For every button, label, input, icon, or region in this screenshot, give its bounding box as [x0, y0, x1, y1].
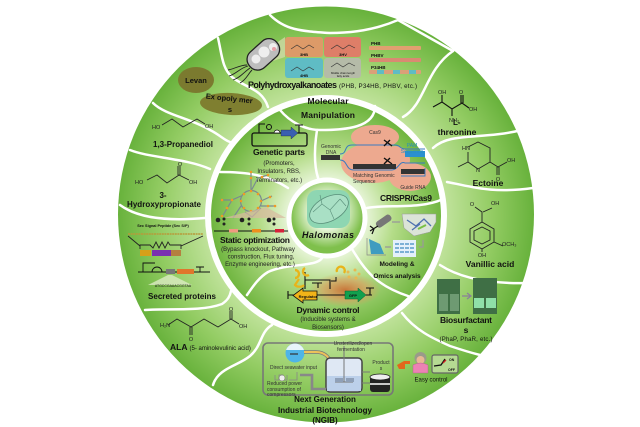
structure: HO [152, 125, 161, 131]
label: PHA examples: (PHB, P34HB, PHBV, etc.) [339, 83, 417, 90]
structure: OH [438, 90, 446, 96]
icon: on/off switch: ON [449, 358, 455, 362]
polymer bars: PHB, PHBV, P34HB [369, 41, 421, 74]
monomer: 3HV [324, 37, 361, 57]
panel: CRISPR/Cas9: Cas9 [369, 130, 381, 136]
icon: sensor molecules [295, 268, 309, 287]
sector: next generation industrial biotechnology: Unsterilized/open [334, 341, 373, 347]
panel: CRISPR/Cas9: Matching Genomic [353, 173, 395, 179]
sector: ALA [160, 307, 251, 352]
panel: dynamic control [288, 267, 381, 331]
panel: CRISPR/Cas9: Guide RNA [400, 185, 426, 191]
panel: static optimization: construction, Flux tuning, [228, 254, 295, 260]
sector: ALA: ALA (5- aminolevulinic acid) [170, 342, 251, 352]
sector: secreted proteins: Secreted proteins [148, 292, 217, 301]
monomer: 4HB: 4HB [300, 73, 308, 78]
signal peptide spring [128, 236, 203, 249]
icon: operator [413, 352, 428, 373]
structure [160, 307, 247, 343]
structure: OH [469, 107, 477, 113]
panel: dynamic control: Dynamic control [296, 305, 360, 315]
icon: sea and ship [286, 344, 304, 362]
panel: dynamic control: (Inducible systems & [300, 317, 356, 323]
structure: OH [189, 180, 197, 186]
sector: next generation industrial biotechnology: consumption of [267, 387, 302, 393]
panel: static optimization: Static optimization [220, 235, 290, 245]
badge: Exopolymers: s [228, 105, 232, 114]
panel: CRISPR/Cas9: Sequence [401, 149, 423, 155]
structure: H₂N [160, 323, 170, 329]
monomer: medium chain length fatty acids: fatty acids [337, 74, 350, 78]
sector: 1,3-Propanediol: 1,3-Propanediol [153, 140, 213, 149]
outer ring: product and application sectors [118, 6, 534, 422]
center: Halomonas cell [289, 180, 365, 256]
sector: next generation industrial biotechnology: Easy control [414, 378, 448, 384]
badge: Levan: Levan [185, 76, 207, 85]
inner disk: molecular tools [208, 98, 444, 334]
structure: HN [462, 146, 470, 152]
panel: CRISPR/Cas9: Genomic [321, 144, 341, 150]
panel: CRISPR/Cas9: PAM [407, 143, 417, 149]
panel: CRISPR/Cas9 [321, 125, 432, 203]
structure [152, 119, 213, 131]
structure: N [476, 168, 480, 174]
DNA strands [321, 145, 425, 176]
orange glow [309, 273, 381, 307]
structure [470, 201, 516, 259]
sector: next generation industrial biotechnology: fermentation [337, 347, 365, 353]
gene circuit [138, 263, 210, 285]
icon: on/off switch [432, 355, 458, 373]
panel: modeling and omics analysis [367, 213, 436, 280]
arrow [462, 293, 471, 299]
structure: OH [491, 201, 499, 207]
icon: model chart [367, 238, 386, 255]
sector: biosurfactants: s [464, 325, 469, 335]
panel: dynamic control: Biosensors) [312, 325, 344, 331]
structure: L- [453, 118, 461, 127]
sector: 3-Hydroxypropionate [127, 162, 202, 209]
seawater pipe [304, 352, 332, 367]
structure: OH [205, 124, 213, 130]
sector: threonine [433, 90, 477, 137]
structure: O [470, 202, 475, 208]
arrow: regulator gene: Regulator [299, 294, 318, 299]
sector: next generation industrial biotechnology: Product [372, 360, 390, 366]
icon: data table [393, 240, 416, 257]
structure [135, 162, 197, 186]
sector: vanillic acid [466, 201, 516, 269]
label: polyhydroxyalkanoates: Polyhydroxyalkanoates [248, 80, 337, 90]
structure: HO [135, 180, 144, 186]
monomer: 4HB [285, 58, 323, 78]
panel: CRISPR/Cas9: CRISPR/Cas9 [380, 193, 432, 203]
sector: next generation industrial biotechnology: Reduced power [267, 381, 302, 387]
sector: 3-Hydroxypropionate: 3- [159, 191, 167, 200]
panel: CRISPR/Cas9: DNA [326, 150, 337, 156]
monomer: 3HB: 3HB [300, 52, 308, 57]
panel: modeling and omics analysis: Omics analysis [373, 273, 421, 280]
sector: biosurfactants: Biosurfactant [440, 315, 492, 325]
panel: modeling and omics analysis: Modeling & [379, 261, 415, 268]
structure: OH [239, 324, 247, 330]
panel: genetic parts: Genetic parts [253, 147, 305, 157]
monomer: 3HB [285, 37, 323, 57]
sector: Levan and exopolymers [178, 67, 263, 117]
icon: compressor [275, 372, 297, 381]
photo: after [473, 278, 497, 314]
signal peptide domains [140, 250, 181, 256]
polymer bars: PHB, PHBV, P34HB: PHBV [371, 53, 384, 58]
sector: Ectoine: Ectoine [473, 178, 504, 188]
label: Molecular Manipulation: Molecular [308, 96, 349, 106]
polymer bars: PHB, PHBV, P34HB: PHB [371, 41, 381, 46]
icon: inducer [331, 267, 360, 281]
panel: genetic parts: (Promoters, [263, 161, 295, 167]
label: NGIB: Next Generation [294, 395, 356, 404]
sector: Ectoine [458, 142, 515, 188]
panel: static optimization [214, 171, 295, 268]
panel: genetic parts [252, 124, 307, 184]
icon: genetic construct [252, 124, 307, 146]
icon: on/off switch: OFF [448, 368, 456, 372]
icon: omics network [402, 214, 436, 236]
label: NGIB: Industrial Biotechnology [278, 406, 373, 415]
panel: genetic parts: Terminators, etc.) [256, 178, 302, 184]
structure [458, 142, 515, 183]
structure: O [189, 337, 194, 343]
structure: NH₂ [449, 118, 459, 124]
icon: pointing hand [397, 361, 410, 369]
DNA sequence: ATGCCGAAACGGTAA [155, 284, 192, 288]
sector: secreted proteins: Sec Signal Peptide (Sec S/P) [137, 224, 189, 228]
sector: vanillic acid: Vanillic acid [466, 259, 514, 269]
icon: bacterium [228, 35, 285, 83]
structure: O [178, 162, 183, 168]
panel: genetic parts: Insulators, RBS, [257, 169, 301, 175]
sector: secreted proteins [128, 224, 217, 301]
structure [433, 90, 477, 127]
structure: O [459, 90, 464, 96]
arrow: reporter gene: GFP [349, 293, 357, 298]
structure: O [229, 307, 234, 313]
structure: OH [507, 158, 515, 164]
panel: CRISPR/Cas9: Sequence [353, 179, 376, 185]
sector: threonine: threonine [438, 127, 477, 137]
sector: polyhydroxyalkanoates [228, 35, 421, 90]
label: Molecular Manipulation: Manipulation [301, 110, 355, 120]
photo: before [437, 279, 460, 314]
badge: Exopolymers [199, 91, 263, 117]
structure: O [496, 177, 501, 183]
panel: static optimization: Enzyme engineering, etc.) [225, 262, 295, 268]
panel: static optimization: (Bypass knockout, Pathway [221, 247, 295, 253]
monomer: medium chain length fatty acids [324, 58, 361, 78]
monomer: medium chain length fatty acids: Middle chain length [331, 71, 355, 75]
badge: Exopolymers: Ex opoly mer [205, 92, 253, 105]
icon: fermenter tank [326, 346, 362, 392]
salmon complex background [341, 125, 431, 191]
sector: next generation industrial biotechnology: compressors [267, 392, 296, 398]
icon: sequencer [370, 213, 400, 234]
pathway network [220, 171, 276, 218]
label: Molecular Manipulation [301, 96, 355, 120]
icon: cell micrograph [305, 189, 353, 229]
icon: scissors [384, 140, 392, 164]
sector: 3-Hydroxypropionate: Hydroxypropionate [127, 200, 202, 209]
monomer: 3HV: 3HV [339, 52, 347, 57]
structure: OCH₃ [502, 242, 516, 248]
sector: biosurfactants: (PhaP, PhaR, etc.) [440, 337, 492, 343]
signal peptide sequence strip [128, 233, 203, 235]
gene circuit [288, 272, 374, 299]
polymer bars: PHB, PHBV, P34HB: P34HB [371, 65, 386, 70]
label: Halomonas: Halomonas [302, 230, 354, 240]
sector dividers [120, 15, 533, 385]
sector: 1,3-Propanediol [152, 119, 213, 149]
regulator gene circuit [214, 207, 288, 232]
process box [263, 343, 393, 395]
label: NGIB [278, 395, 373, 425]
label: NGIB: (NGIB) [312, 416, 338, 425]
sector: next generation industrial biotechnology: s [380, 366, 383, 372]
icon: product cylinder [370, 374, 390, 392]
sector: biosurfactants [437, 278, 497, 343]
compressor line [300, 375, 326, 389]
structure: OH [478, 253, 486, 259]
sector: next generation industrial biotechnology [263, 341, 458, 425]
sector: next generation industrial biotechnology: Direct seawater input [270, 365, 318, 371]
inner dividers [220, 106, 443, 296]
